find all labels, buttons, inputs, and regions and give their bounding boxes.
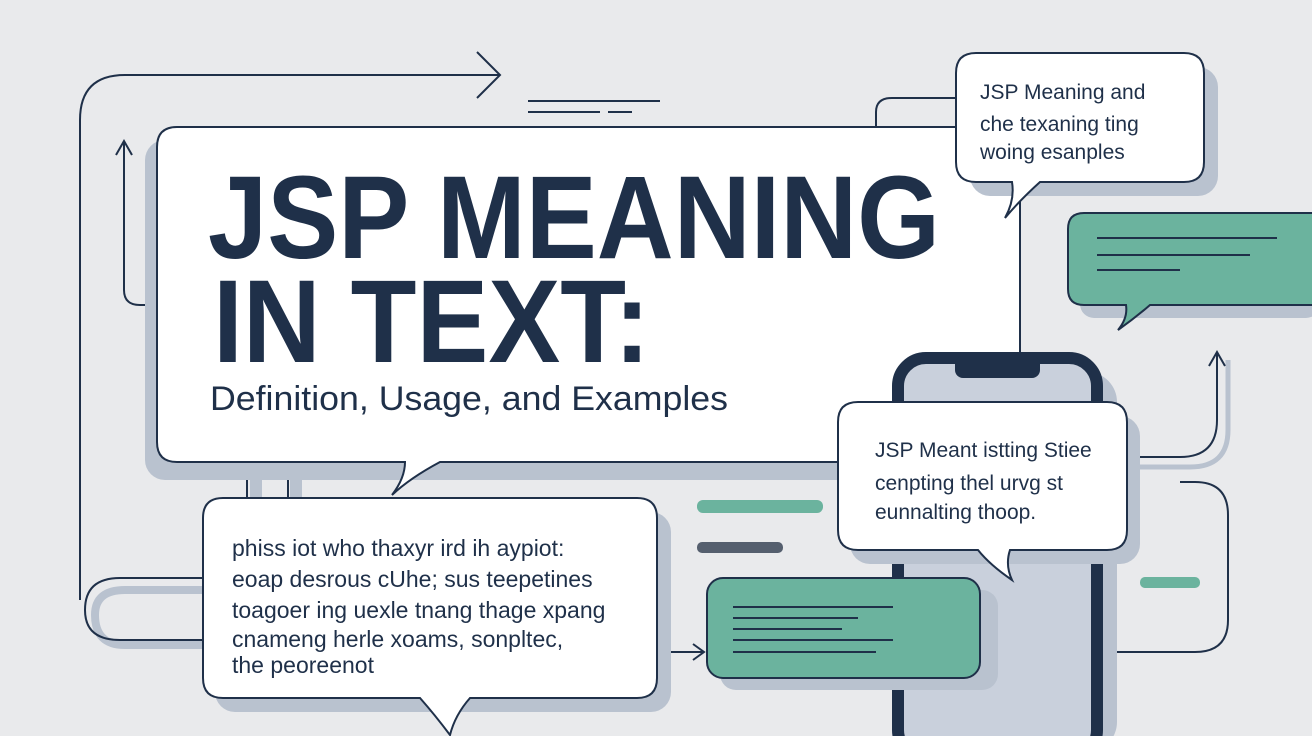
phone bubble: cenpting thel urvg st	[875, 472, 1063, 495]
bottom left bubble: eoap desrous cUhe; sus teepetines	[232, 566, 593, 592]
left bars	[697, 500, 823, 553]
phone	[898, 356, 1117, 736]
bracket line right	[1103, 482, 1228, 652]
bottom left bubble	[203, 498, 671, 735]
phone bubble	[838, 402, 1140, 580]
title: JSP MEANING	[208, 152, 940, 284]
green small bar right	[1140, 577, 1200, 588]
arrow: to green bubble	[655, 644, 704, 660]
arrow: right up	[1122, 352, 1228, 467]
connector: back bubble outline top right	[876, 98, 960, 128]
left loop	[85, 578, 203, 645]
phone bubble: eunnalting thoop.	[875, 501, 1036, 524]
arrow: inner loop	[116, 141, 157, 305]
bottom left bubble: the peoreenot	[232, 652, 375, 678]
arrow: outer loop	[80, 52, 500, 600]
green bubble right	[1068, 213, 1312, 330]
top right bubble: JSP Meaning and	[980, 81, 1145, 104]
bottom left bubble: phiss iot who thaxyr ird ih aypiot:	[232, 535, 564, 561]
bottom left bubble: cnameng herle xoams, sonpltec,	[232, 626, 563, 652]
green bubble bottom	[707, 578, 998, 690]
main title bubble: IN TEXT:	[213, 256, 650, 388]
top right bubble: che texaning ting	[980, 113, 1139, 136]
subtitle: Definition, Usage, and Examples	[210, 380, 728, 418]
top right bubble: woing esanples	[979, 141, 1125, 164]
main title bubble	[145, 127, 1020, 495]
decorative lines top	[528, 101, 660, 112]
phone bubble: JSP Meant istting Stiee	[875, 439, 1092, 462]
bottom left bubble: toagoer ing uexle tnang thage xpang	[232, 597, 605, 623]
connectors under main bubble	[247, 462, 302, 502]
top right bubble	[956, 53, 1218, 218]
